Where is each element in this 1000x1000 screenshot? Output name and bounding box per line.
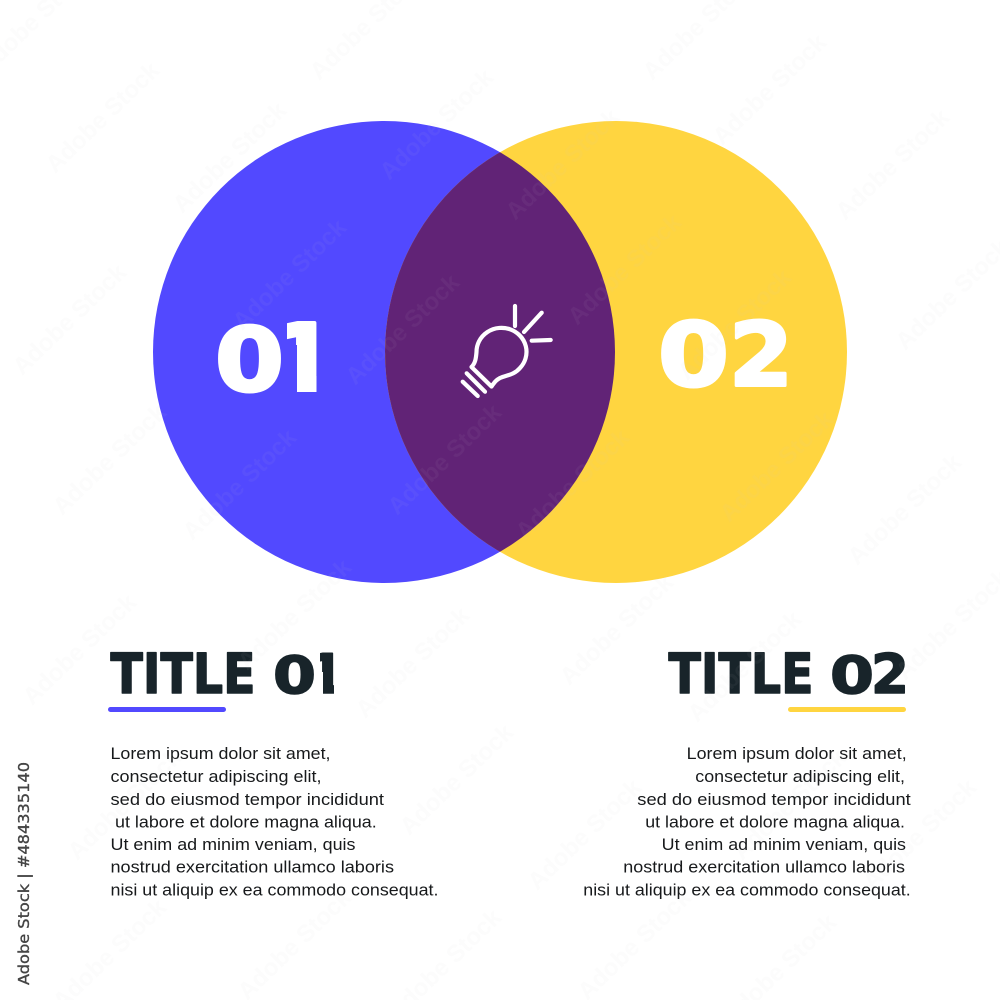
watermark pattern: Adobe Stock [341, 268, 465, 390]
panel: venn diagram [153, 121, 847, 583]
body text 01: ut labore et dolore magna aliqua. [115, 813, 377, 832]
watermark pattern: Adobe Stock [843, 448, 967, 570]
number 01: 1 [272, 305, 336, 412]
body text 02: nisi ut aliquip ex ea commodo consequat. [583, 881, 911, 900]
watermark pattern: Adobe Stock [523, 773, 647, 895]
watermark pattern: Adobe Stock [351, 601, 475, 723]
body text 01: Ut enim ad minim veniam, quis [110, 835, 356, 854]
watermark pattern: Adobe Stock [563, 208, 687, 330]
body text 02: consectetur adipiscing elit, [695, 767, 905, 786]
watermark pattern: Adobe Stock [18, 588, 142, 710]
number 02: 2 [729, 304, 793, 406]
watermark pattern: Adobe Stock [63, 743, 187, 865]
watermark pattern: Adobe Stock [375, 63, 499, 185]
heading: title 02: TITLE [668, 642, 814, 706]
watermark pattern: Adobe Stock [858, 773, 982, 895]
body text 01: consectetur adipiscing elit, [110, 767, 322, 786]
watermark pattern: Adobe Stock [683, 605, 807, 727]
watermark pattern: Adobe Stock [383, 398, 507, 520]
underline: yellow [788, 707, 906, 712]
body text 01: nisi ut aliquip ex ea commodo consequat. [110, 881, 438, 900]
watermark pattern: Adobe Stock [501, 103, 625, 225]
body text 02 [583, 744, 911, 900]
watermark pattern: Adobe Stock [228, 213, 352, 335]
number 01: 0 [215, 309, 284, 412]
number 01 [218, 321, 316, 394]
watermark pattern: Adobe Stock [831, 103, 955, 225]
watermark pattern: Adobe Stock [715, 405, 839, 527]
watermark pattern: Adobe Stock [511, 423, 635, 545]
underline: blue [108, 707, 226, 712]
heading: title 01 [110, 652, 334, 695]
heading: title 02 [668, 642, 909, 706]
body text 02: ut labore et dolore magna aliqua. [645, 813, 905, 832]
panel: text block 02 [583, 642, 911, 900]
watermark pattern: Adobe Stock [8, 258, 132, 380]
body text 01 [110, 744, 438, 900]
watermark pattern: Adobe Stock [395, 718, 519, 840]
watermark pattern: Adobe Stock [178, 423, 302, 545]
body text 01: sed do eiusmod tempor incididunt [110, 790, 384, 809]
heading: title 01: TITLE [110, 642, 256, 706]
circle: blue [153, 121, 615, 583]
heading: title 02: 2 [871, 643, 909, 706]
panel: text block 01 [108, 642, 438, 900]
body text 02: nostrud exercitation ullamco laboris [623, 858, 905, 877]
body text 01: Lorem ipsum dolor sit amet, [110, 744, 330, 763]
body text 02: Ut enim ad minim veniam, quis [662, 835, 906, 854]
overlap lens [385, 152, 615, 552]
stock credit: Adobe Stock | #484335140 [15, 762, 33, 985]
heading: title 01: 1 [308, 643, 345, 706]
watermark pattern: Adobe Stock [168, 96, 292, 218]
watermark pattern: Adobe Stock [673, 263, 797, 385]
heading: title 02: 0 [830, 646, 874, 706]
watermark pattern: Adobe Stock [48, 398, 172, 520]
watermark pattern: Adobe Stock [41, 56, 165, 178]
heading: title 01: 0 [273, 646, 316, 706]
body text 02: sed do eiusmod tempor incididunt [637, 790, 911, 809]
body text 01: nostrud exercitation ullamco laboris [110, 858, 394, 877]
icon: light bulb [463, 306, 551, 396]
circle: yellow [385, 121, 847, 583]
body text 02: Lorem ipsum dolor sit amet, [687, 744, 907, 763]
number 02 [658, 304, 793, 407]
number 02: 0 [658, 304, 729, 407]
watermark pattern: Adobe Stock [708, 28, 832, 150]
watermark pattern: Adobe Stock [555, 568, 679, 690]
watermark pattern: Adobe Stock [728, 743, 852, 865]
watermark pattern: Adobe Stock [233, 553, 357, 675]
